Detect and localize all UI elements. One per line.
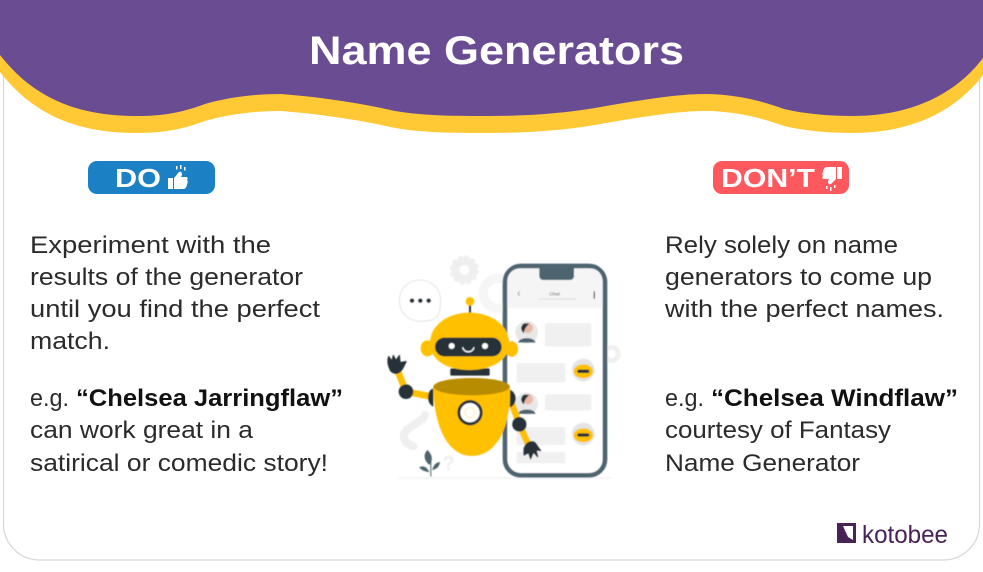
DO badge (88, 161, 215, 194)
chest button (457, 400, 483, 425)
visor (435, 338, 502, 356)
DO text block: match. (30, 328, 110, 355)
antenna (469, 304, 471, 313)
illustration: robot and phone chat (388, 257, 618, 479)
left hand (388, 356, 406, 373)
icon: thumbs up (168, 165, 188, 189)
DON'T text block: Rely solely on name (665, 232, 898, 259)
DON'T example text: e.g. (665, 385, 704, 412)
title: Name Generators (309, 29, 684, 73)
DON'T text block: generators to come up (665, 264, 932, 291)
DO example text: can work great in a (30, 417, 254, 444)
DO text block: results of the generator (30, 264, 303, 291)
yellow wave (0, 0, 983, 133)
DO text block (30, 232, 320, 355)
icon: open book (837, 523, 856, 543)
DON'T text block: with the perfect names. (664, 296, 944, 323)
DO example text: e.g. (30, 385, 69, 412)
neck (450, 368, 490, 376)
chat bubbles (517, 323, 591, 463)
DON'T example text (665, 385, 958, 477)
speech bubble (399, 280, 441, 321)
DO example text: “Chelsea Jarringflaw” (76, 385, 343, 412)
DO badge: DO (115, 163, 161, 193)
DON'T example text: “Chelsea Windflaw” (711, 385, 958, 412)
DON'T example text: courtesy of Fantasy (665, 417, 891, 444)
kotobee logo: kotobee (862, 521, 948, 549)
right arm (512, 403, 529, 447)
background gears and symbols: ? (443, 453, 455, 475)
DO example text (30, 385, 343, 477)
phone: Chat (549, 292, 560, 298)
DON'T badge: DON’T (721, 163, 815, 193)
DO text block: until you find the perfect (30, 296, 320, 323)
DO example text: satirical or comedic story! (30, 450, 328, 477)
DON'T example text: Name Generator (665, 450, 860, 477)
background gears and symbols (404, 257, 618, 475)
body (433, 383, 510, 456)
left arm (397, 370, 432, 397)
DON'T text block (664, 232, 944, 323)
head (430, 313, 509, 370)
phone (505, 266, 605, 475)
DON'T badge (713, 161, 849, 194)
chat avatars (515, 321, 595, 445)
DO text block: Experiment with the (30, 232, 271, 259)
header banner (0, 0, 983, 133)
purple wave (0, 0, 983, 116)
plant (419, 450, 440, 477)
icon: thumbs down (822, 167, 842, 191)
ears (421, 340, 434, 356)
ground line (398, 477, 612, 479)
right hand (524, 442, 541, 459)
robot (388, 297, 541, 459)
